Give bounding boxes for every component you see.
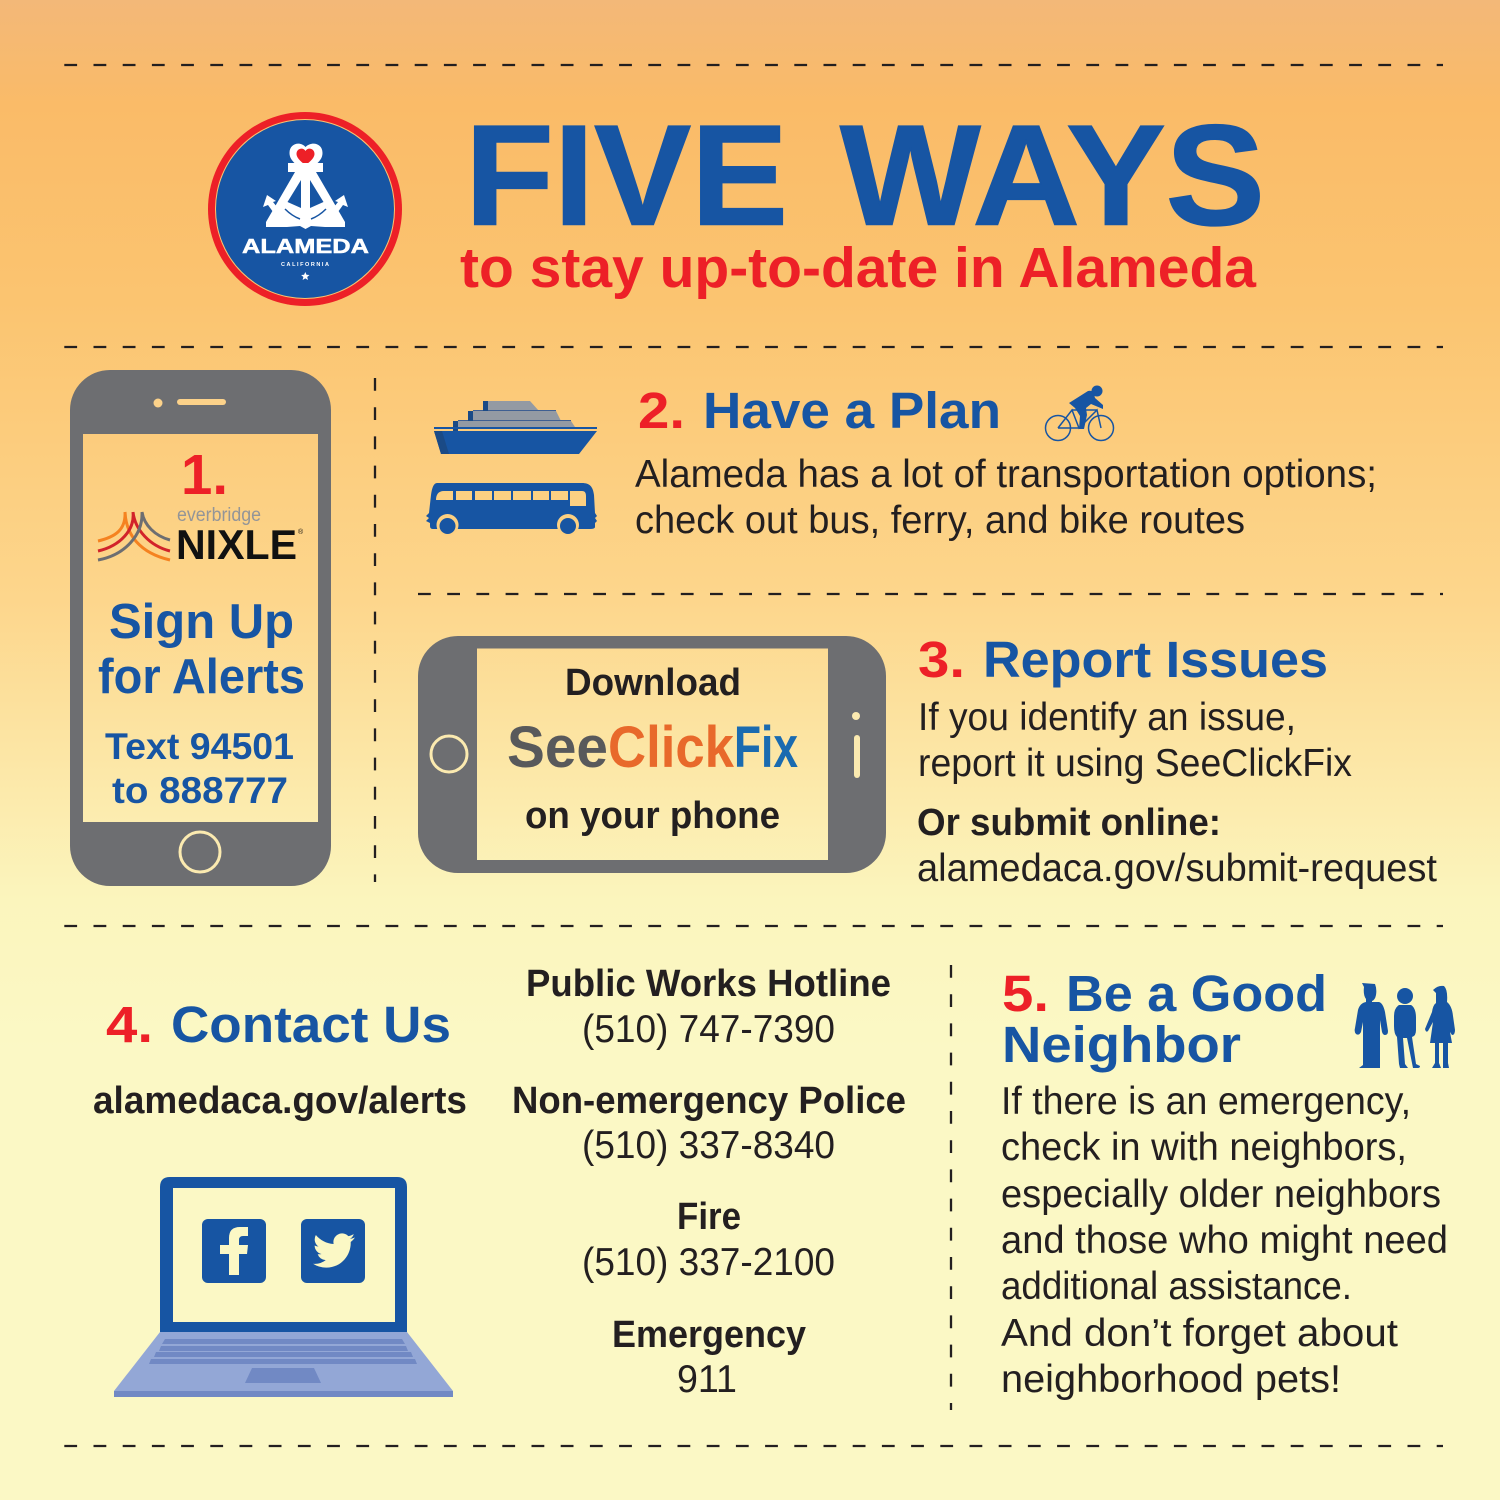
heading: 5. Be a Good Neighbor: Be a Good (1066, 965, 1327, 1022)
logo: SeeClickFix (507, 715, 798, 780)
panel: step 1 phone, sign up for Nixle alerts (70, 370, 331, 886)
logo: City of Alameda seal: CALIFORNIA (281, 262, 329, 268)
heading: 5. Be a Good Neighbor: 5. (1002, 965, 1049, 1022)
text: phone numbers (512, 963, 906, 1401)
text: phone numbers: (510) 747-7390 (582, 1008, 835, 1051)
panel: step 1 phone, sign up for Nixle alerts: Text 94501 (105, 726, 294, 767)
text: step 3 body: alamedaca.gov/submit-request (917, 847, 1437, 890)
title (460, 96, 1265, 300)
text: step 5 body: especially older neighbors (1001, 1173, 1441, 1216)
heading: 2. Have a Plan: 2. (638, 382, 685, 439)
heading: 5. Be a Good Neighbor: Neighbor (1002, 1016, 1241, 1073)
panel: step 1 phone, sign up for Nixle alerts: to 888777 (112, 770, 288, 811)
heading: 5. Be a Good Neighbor (1002, 965, 1327, 1073)
text: alerts URL: alamedaca.gov/alerts (93, 1080, 467, 1122)
title: to stay up-to-date in Alameda (460, 236, 1257, 300)
heading: 2. Have a Plan: Have a Plan (703, 382, 1001, 439)
text: phone numbers: Fire (677, 1196, 741, 1238)
panel: step 1 phone, sign up for Nixle alerts: Sign Up (109, 595, 294, 649)
title: WAYS (840, 96, 1265, 256)
text: phone numbers: (510) 337-8340 (582, 1124, 835, 1167)
logo: everbridge Nixle: ® (298, 528, 304, 536)
logo: everbridge Nixle: NIXLE (176, 521, 297, 568)
text: phone numbers: Public Works Hotline (526, 963, 891, 1005)
icon: three people (1355, 983, 1455, 1068)
text: phone numbers: Emergency (612, 1314, 806, 1356)
icon: Twitter (301, 1219, 365, 1283)
logo: SeeClickFix: Click (608, 715, 735, 780)
text: step 2 body: check out bus, ferry, and bike routes (635, 499, 1245, 542)
text: step 2 body: Alameda has a lot of transportation options; (635, 453, 1377, 496)
text: step 5 body: neighborhood pets! (1001, 1358, 1341, 1401)
logo: everbridge Nixle (98, 505, 304, 568)
logo: SeeClickFix: Fix (734, 715, 798, 780)
icon: ferry (434, 401, 597, 454)
text: step 5 body: And don’t forget about (1001, 1312, 1398, 1355)
panel: SeeClickFix landscape phone: Download (565, 662, 741, 704)
heading: 3. Report Issues: Report Issues (983, 631, 1328, 688)
text: phone numbers: (510) 337-2100 (582, 1241, 835, 1284)
text: step 3 body: Or submit online: (917, 802, 1221, 844)
text: step 2 body (635, 453, 1377, 542)
panel: SeeClickFix landscape phone (418, 636, 886, 873)
heading: 3. Report Issues: 3. (918, 631, 965, 688)
text: step 5 body: and those who might need (1001, 1219, 1448, 1262)
panel: step 1 phone, sign up for Nixle alerts: 1. (181, 443, 228, 507)
heading: 4. Contact Us: Contact Us (171, 996, 451, 1053)
heading: 4. Contact Us: 4. (106, 996, 153, 1053)
panel: step 1 phone, sign up for Nixle alerts: for Alerts (98, 650, 305, 704)
text: step 5 body: check in with neighbors, (1001, 1126, 1407, 1169)
logo: City of Alameda seal: ALAMEDA (242, 235, 369, 258)
text: step 3 body (917, 696, 1437, 890)
icon: cyclist (1046, 386, 1114, 440)
icon: Facebook (202, 1219, 266, 1283)
title: FIVE (465, 96, 788, 256)
text: step 3 body: report it using SeeClickFix (918, 742, 1352, 785)
text: step 5 body: If there is an emergency, (1001, 1080, 1411, 1123)
text: step 3 body: If you identify an issue, (918, 696, 1296, 739)
logo: SeeClickFix: See (507, 715, 608, 780)
icon: laptop with Facebook and Twitter (114, 1177, 453, 1397)
text: phone numbers: 911 (677, 1358, 737, 1401)
text: step 5 body (1001, 1080, 1448, 1401)
logo: everbridge Nixle: everbridge (177, 505, 261, 526)
text: step 5 body: additional assistance. (1001, 1265, 1352, 1308)
icon: bus (426, 483, 597, 536)
panel: SeeClickFix landscape phone: on your phone (525, 795, 780, 837)
text: phone numbers: Non-emergency Police (512, 1080, 906, 1122)
logo: City of Alameda seal (208, 112, 402, 306)
